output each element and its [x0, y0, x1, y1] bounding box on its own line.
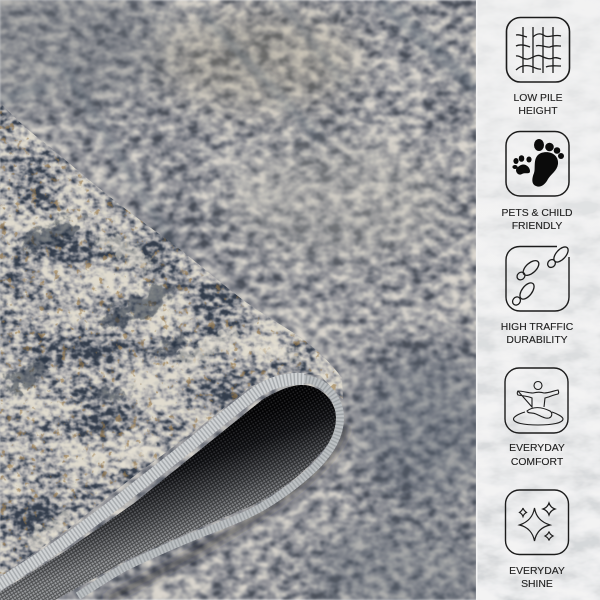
label: pets and child friendly: PETS & CHILD: [501, 208, 573, 219]
label: everyday shine: [509, 566, 565, 590]
label: low pile height: HEIGHT: [518, 106, 558, 117]
rug underside: [0, 385, 336, 600]
label: everyday comfort: [509, 443, 565, 468]
panel: features sidebar: [476, 0, 600, 600]
icon: everyday comfort: [505, 368, 568, 433]
icon: pets and child friendly: [506, 132, 569, 196]
label: low pile height: [513, 93, 563, 117]
roll dark blotches: [0, 215, 190, 401]
rolled rug top surface: [0, 105, 343, 576]
icon: high traffic durability: [506, 244, 571, 311]
label: pets and child friendly: [501, 208, 573, 232]
label: everyday shine: EVERYDAY: [509, 566, 565, 577]
roll cream highlights: [23, 225, 304, 552]
rug floor diagonal streaks: [0, 0, 476, 248]
label: everyday shine: SHINE: [521, 579, 553, 590]
shadow under roll: [105, 425, 346, 600]
rug hem binding: [0, 379, 340, 596]
hem upper edge: [0, 379, 304, 586]
icon: low pile height: [506, 18, 570, 82]
label: low pile height: LOW PILE: [513, 93, 563, 104]
label: everyday comfort: COMFORT: [511, 457, 564, 468]
icon: everyday shine: [506, 490, 568, 554]
label: high traffic durability: HIGH TRAFFIC: [501, 322, 574, 333]
label: everyday comfort: EVERYDAY: [509, 443, 565, 454]
label: high traffic durability: [501, 322, 574, 346]
label: high traffic durability: DURABILITY: [506, 335, 568, 346]
label: pets and child friendly: FRIENDLY: [512, 221, 562, 232]
hem lower edge: [78, 379, 340, 596]
